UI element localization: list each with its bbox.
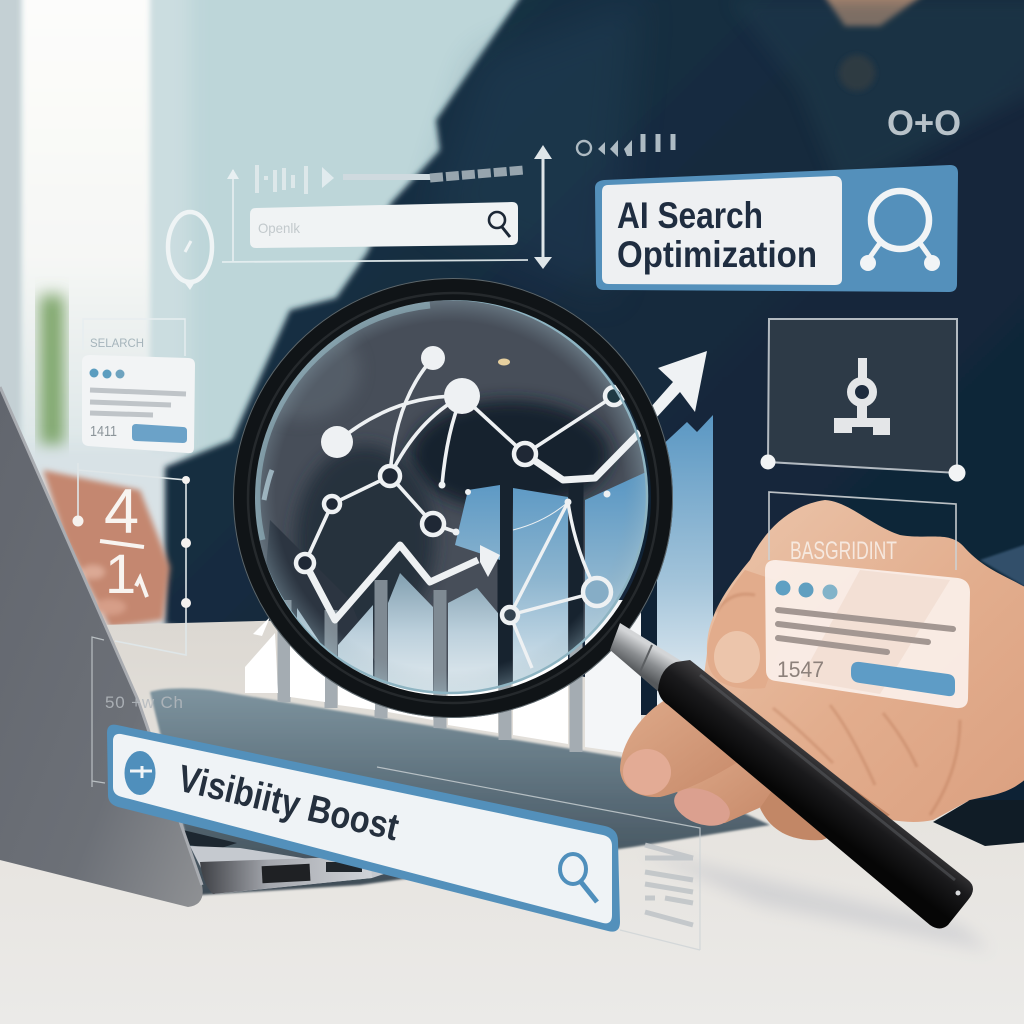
badge: AI Search Optimization: AI Search [617,195,763,236]
magnifying glass lens [234,278,672,720]
panel: left info card: 1411 [90,423,117,440]
panel: left number card [72,463,191,655]
hologram: top search bar: Openlk [258,220,301,236]
desk shadow under handle [640,850,990,950]
hologram: top search bar [222,134,673,269]
second finger [677,735,800,823]
finger nails [623,631,760,833]
chart: rising bars behind lens [245,415,713,755]
icon: clock dial [168,212,212,290]
laptop base [150,688,770,895]
lens rim [234,278,672,718]
magnifying glass handle [610,623,973,928]
icon: search person [860,191,940,271]
desk surface [0,620,1024,1024]
panel: translucent card in hand [765,492,970,708]
small data strip beside search bar [645,845,693,925]
panel: translucent card in hand: BASGRIDINT [790,537,897,565]
thumb [707,570,790,689]
top right glyph label: O+O [887,104,961,143]
small label near laptop: 50 +w Ch [105,693,183,712]
hologram frame lines near laptop [92,637,700,950]
hand holding magnifier [620,500,1024,846]
network graph [305,358,640,668]
panel: translucent card in hand: 1547 [777,657,824,682]
arrow: trend arrow top right of lens [650,351,707,417]
badge: AI Search Optimization [595,165,958,292]
third finger [760,750,890,840]
background: person in navy shirt [165,0,1024,850]
icon: magnifier [560,854,597,902]
lens dark reflections [266,341,618,676]
search bar: Visibility Boost [107,725,620,932]
search bar: Visibility Boost: Visibiity Boost [174,758,403,849]
icon: plus circle [124,751,156,795]
laptop screen lid [0,387,203,907]
panel: left info card [82,319,195,453]
lens: refracted bars [284,472,646,692]
background: blurred left hand [43,470,170,628]
panel: left number card: 4 [104,477,139,547]
badge: AI Search Optimization: Optimization [617,234,817,275]
panel: left info card: SELARCH [90,336,144,350]
panel: left number card: 1 [105,542,136,605]
panel: network node card [760,319,966,482]
index finger [620,690,770,797]
